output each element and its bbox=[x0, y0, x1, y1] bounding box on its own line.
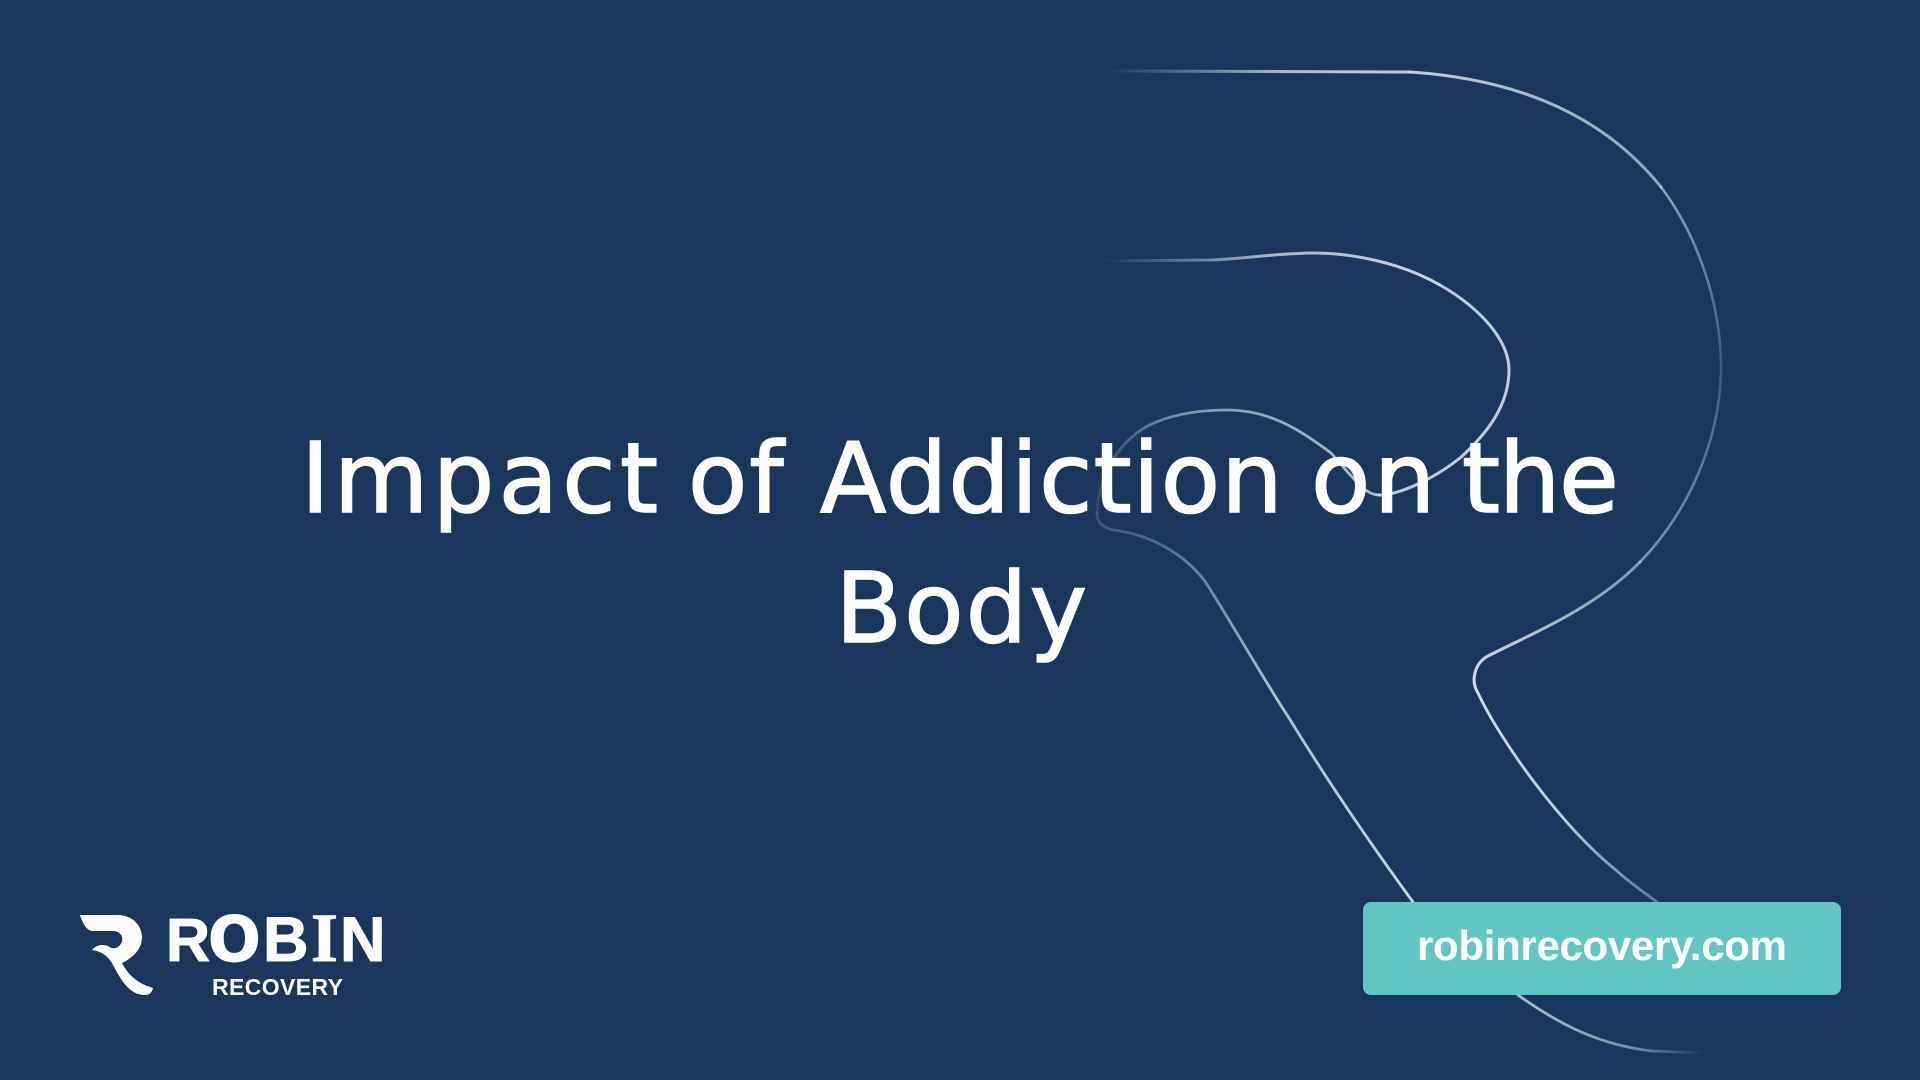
title: Addiction bbox=[820, 422, 1284, 535]
logo wordmark: O bbox=[208, 903, 261, 976]
decorative R outline bbox=[1097, 71, 1721, 1053]
logo wordmark: N bbox=[340, 905, 386, 975]
icon: R mark bbox=[80, 915, 153, 995]
logo wordmark: B bbox=[263, 905, 308, 975]
logo wordmark: I bbox=[311, 900, 338, 976]
website button bbox=[1363, 902, 1841, 995]
logo wordmark: R bbox=[166, 906, 210, 974]
title bbox=[301, 422, 1618, 665]
title: Body bbox=[836, 552, 1089, 665]
logo: Robin Recovery bbox=[80, 900, 386, 1000]
title: Impact bbox=[301, 422, 662, 535]
title: the bbox=[1462, 422, 1618, 535]
title: of bbox=[688, 422, 786, 535]
title: on bbox=[1311, 422, 1439, 535]
website button: robinrecovery.com bbox=[1417, 922, 1787, 969]
logo subtitle: RECOVERY bbox=[212, 974, 343, 1000]
